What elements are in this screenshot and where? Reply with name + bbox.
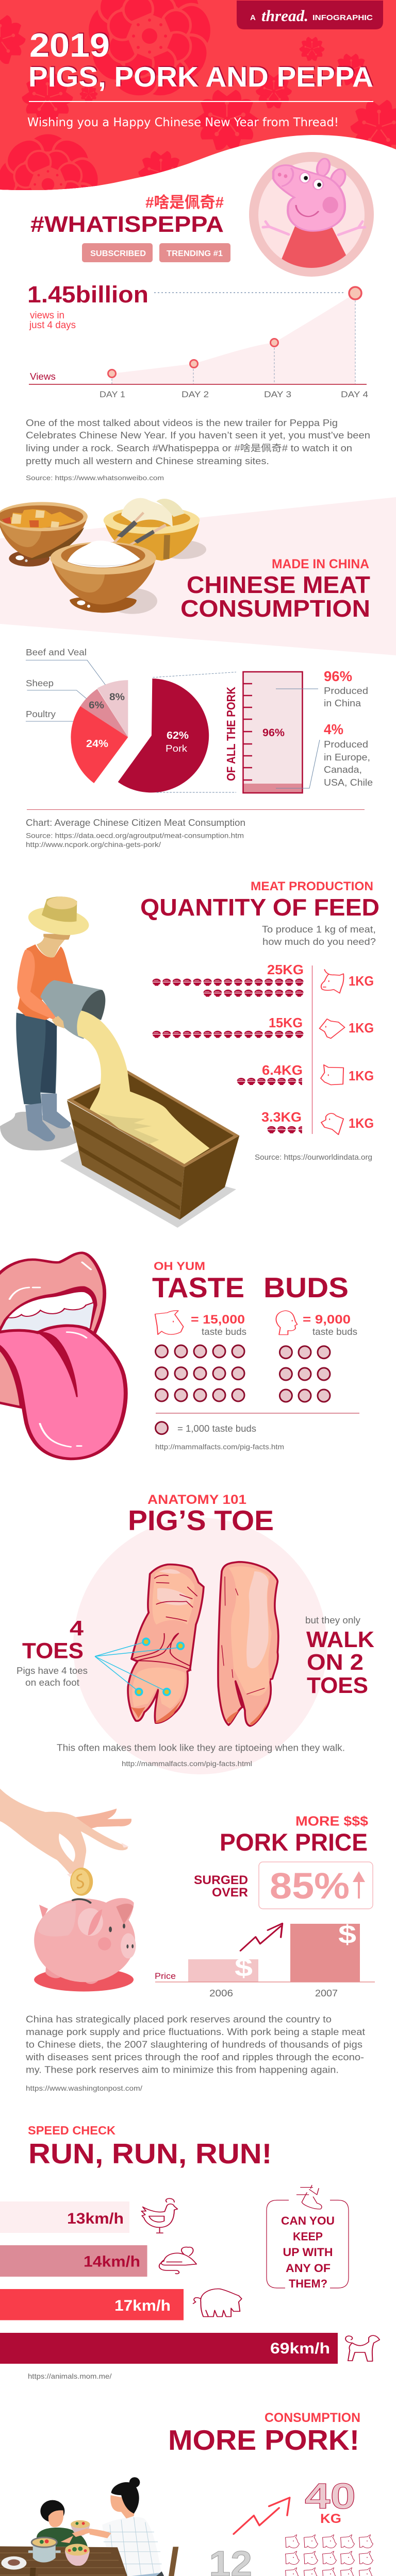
chart: feed quantities <box>152 962 374 1134</box>
title <box>28 25 374 93</box>
data points <box>108 287 361 377</box>
title rule <box>29 101 373 102</box>
icon: food bowls <box>0 498 206 614</box>
heading: taste buds <box>152 1260 349 1303</box>
animal icons <box>141 2198 380 2361</box>
heading: quantity of feed: QUANTITY OF FEED <box>140 894 380 921</box>
callout: surged over 85 percent: 85% <box>270 1866 350 1907</box>
text block: tiptoeing: This often makes them look like they are tiptoeing when they walk. <box>57 1742 345 1753</box>
bar: pig: 17km/h <box>114 2297 171 2314</box>
text block: peppa paragraph: living under a rock. Search #Whatispeppa or #啥是佩奇# to watch it on <box>26 443 352 453</box>
text block: pork reserves: to Chinese diets, the 2007 slaughtering of hundreds of thousands of pigs <box>26 2040 362 2050</box>
heading: pork price: MORE $$$ <box>295 1814 369 1829</box>
icon: peppa pig portrait <box>249 152 374 278</box>
text block: peppa paragraph: One of the most talked about videos is the new trailer for Peppa Pig <box>26 418 338 428</box>
caption <box>29 310 76 331</box>
trotter: front with toes marked <box>128 1565 204 1723</box>
heading: quantity of feed: how much do you need? <box>262 936 376 947</box>
caption: views in <box>30 310 64 321</box>
day labels: DAY 4 <box>341 389 368 399</box>
pie labels <box>26 647 189 754</box>
row: 6.4kg pig: 6.4KG <box>262 1062 303 1078</box>
day labels: DAY 3 <box>264 389 291 399</box>
heading: more pork: MORE PORK! <box>168 2424 359 2456</box>
stat: 40 kg in 2017: KG <box>320 2512 341 2526</box>
heading: more pork: CONSUMPTION <box>265 2411 360 2425</box>
text block: peppa paragraph: Celebrates Chinese New Year. If you haven’t seen it yet, you must’ve been <box>26 430 370 440</box>
callout text <box>281 2214 335 2290</box>
bar: 2007 <box>290 1924 360 1982</box>
button: trending <box>159 243 230 262</box>
heading: run, run, run: RUN, RUN, RUN! <box>28 2138 272 2170</box>
callout: can you keep up <box>267 2185 349 2290</box>
icon: mouth with tongue <box>0 1253 126 1459</box>
slice: sheep <box>80 689 128 737</box>
trotter: side view <box>218 1562 278 1726</box>
food on the table <box>1 2520 92 2570</box>
axis labels: 2007 <box>315 1988 338 1998</box>
stat: 96 percent <box>324 668 368 708</box>
heading: run, run, run <box>28 2124 272 2170</box>
heading: pork price: PORK PRICE <box>220 1828 368 1856</box>
text block: chart sources: Chart: Average Chinese Citizen Meat Consumption <box>26 818 245 828</box>
title: PIGS, PORK AND PEPPA <box>29 60 374 92</box>
stat: pig taste buds <box>155 1311 246 1401</box>
pictogram: 40 pig heads <box>286 2535 373 2576</box>
slice: beef and veal <box>97 680 128 737</box>
callout text: CAN YOU <box>281 2214 335 2227</box>
stat: 4 percent: Canada, <box>324 765 362 775</box>
heading: pig's toe: ANATOMY 101 <box>147 1493 246 1507</box>
coin <box>70 1868 93 1896</box>
stat: 4 percent: in Europe, <box>324 752 370 762</box>
callout: walk on 2 toes: TOES <box>307 1673 368 1698</box>
heading: taste buds: BUDS <box>263 1272 349 1303</box>
chart: running speed bars <box>0 2198 380 2364</box>
woman <box>79 2477 167 2576</box>
bar: mouse <box>0 2245 147 2277</box>
pie labels: Pork <box>166 743 188 754</box>
text block: pork reserves: with diseases sent prices through the roof and ripples through the econo- <box>25 2052 364 2062</box>
logo tab: INFOGRAPHIC <box>312 13 373 22</box>
chair: woman <box>111 2547 178 2576</box>
icon: running shoe <box>297 2185 322 2209</box>
logo tab: thread. <box>261 7 308 25</box>
stat: 96 percent: in China <box>324 698 361 708</box>
bar: chicken <box>0 2201 129 2233</box>
row: 25kg cow: 25KG <box>267 962 304 977</box>
text block: tiptoeing: http://mammalfacts.com/pig-facts.html <box>122 1759 252 1768</box>
heading: pig's toe: PIG’S TOE <box>128 1504 274 1536</box>
chart: pork price bars <box>155 1920 375 1998</box>
stat: pig taste buds: = 15,000 <box>191 1313 245 1327</box>
row: 15kg sheep <box>269 1015 374 1036</box>
callout text: KEEP <box>293 2230 323 2243</box>
pie labels: Poultry <box>26 709 56 719</box>
chart: meat consumption pie <box>26 647 236 792</box>
stat: human taste buds <box>276 1311 357 1402</box>
row: 25kg cow: 1KG <box>349 973 374 989</box>
bar: chicken: 13km/h <box>67 2210 124 2227</box>
caption: just 4 days <box>29 320 76 331</box>
callout: walk on 2 toes: ON 2 <box>307 1650 364 1675</box>
icon: human head <box>276 1311 297 1335</box>
heading: more pork <box>168 2411 360 2456</box>
pictogram: 15 pig buds <box>156 1345 244 1401</box>
slice: poultry <box>71 706 128 783</box>
row: 3.3kg chicken: 3.3KG <box>261 1109 302 1125</box>
stat: 4 percent: 4% <box>324 721 343 737</box>
y label: Views <box>30 371 56 382</box>
text block: chart sources: http://www.ncpork.org/china-gets-pork/ <box>26 840 161 849</box>
title: 2019 <box>29 26 110 64</box>
title: 2019 <box>30 25 111 63</box>
icon: hand and piggy bank <box>0 1789 136 1991</box>
legend: taste buds: http://mammalfacts.com/pig-facts.htm <box>155 1443 284 1451</box>
logo tab: A <box>250 13 256 22</box>
steamer with dumplings <box>103 498 206 561</box>
row: 3.3kg chicken <box>261 1109 374 1131</box>
row: 6.4kg pig <box>262 1062 374 1083</box>
arrow: rising <box>240 1923 283 1951</box>
rice bowl pictograms <box>152 979 307 1133</box>
callout text: THEM? <box>289 2277 327 2290</box>
callout: 4 toes: Pigs have 4 toes <box>16 1666 88 1676</box>
panel: pig's toe background <box>73 1518 327 1774</box>
text block: peppa paragraph: Source: https://www.whatsonweibo.com <box>26 474 164 482</box>
bar: dog <box>0 2333 338 2364</box>
stat: 40 kg in 2017 <box>286 2476 373 2576</box>
text block: pork reserves: https://www.washingtonpost.com/ <box>26 2084 142 2092</box>
bar: 2006 <box>188 1959 258 1982</box>
pie labels: 8% <box>109 692 125 703</box>
heading: chinese meat consumption: MADE IN CHINA <box>272 557 369 571</box>
chart: pork production bar <box>224 668 373 793</box>
bowl with tofu <box>0 502 88 567</box>
slice: pork <box>118 679 209 792</box>
day labels: DAY 2 <box>182 389 209 399</box>
chinese hashtag: #啥是佩奇# <box>145 194 224 211</box>
callout text: UP WITH <box>283 2246 333 2259</box>
pie labels: 62% <box>167 730 189 741</box>
text block: tiptoeing <box>57 1742 345 1768</box>
toe pointer lines <box>95 1642 177 1690</box>
child <box>37 2500 88 2576</box>
heading: run, run, run: SPEED CHECK <box>28 2124 116 2137</box>
bowl with rice <box>50 540 157 614</box>
heading: quantity of feed: To produce 1 kg of meat, <box>262 924 376 935</box>
text block: pork reserves: manage pork supply and price fluctuations. With pork being a staple meat <box>26 2027 365 2037</box>
bar: pig <box>0 2289 184 2320</box>
callout: surged over 85 percent <box>194 1862 373 1909</box>
text block: peppa paragraph <box>26 418 370 482</box>
english hashtag: #WHATISPEPPA <box>30 212 224 237</box>
panel: whatispeppa heading <box>30 194 230 262</box>
dollar signs <box>235 1920 356 1982</box>
stat: pig taste buds: taste buds <box>202 1327 246 1337</box>
row: 15kg sheep: 1KG <box>349 1020 374 1036</box>
pie labels: 6% <box>89 700 104 711</box>
source: speed: https://animals.mom.me/ <box>28 2372 112 2380</box>
chart area <box>112 293 355 384</box>
heading: chinese meat consumption: CHINESE MEAT <box>187 571 370 598</box>
heading: quantity of feed: MEAT PRODUCTION <box>251 879 373 893</box>
stat: 96 percent: Produced <box>324 686 368 696</box>
stat: 96 percent: 96% <box>324 668 352 684</box>
toe markers <box>136 1638 184 1695</box>
piggy bank <box>34 1898 136 1991</box>
callout: 4 toes: TOES <box>22 1639 84 1664</box>
panel: chinese meat consumption background <box>0 497 396 655</box>
row: 25kg cow <box>267 962 374 989</box>
axis labels <box>155 1971 338 1998</box>
callout: 4 toes: on each foot <box>25 1677 79 1688</box>
chart: views over 4 days <box>27 281 368 399</box>
panel: header <box>0 0 396 190</box>
axis labels: Price <box>155 1971 176 1981</box>
heading: taste buds: TASTE <box>152 1272 244 1303</box>
stat: human taste buds: taste buds <box>312 1327 357 1337</box>
day labels <box>100 389 368 399</box>
bar: dog: 69km/h <box>270 2340 330 2357</box>
title: PIGS, PORK AND PEPPA <box>28 61 373 93</box>
icon: farmer pouring feed into trough <box>0 896 239 1228</box>
pie labels: 24% <box>86 738 108 750</box>
button: subscribed <box>82 243 153 262</box>
callout: walk on 2 toes: WALK <box>306 1627 374 1652</box>
subtitle: Wishing you a Happy Chinese New Year from Thread! <box>27 116 339 129</box>
stat: 4 percent <box>324 721 373 788</box>
text block: chart sources <box>26 818 245 849</box>
callout frame <box>267 2200 349 2288</box>
row: 15kg sheep: 15KG <box>269 1015 303 1030</box>
callout text: ANY OF <box>286 2262 331 2275</box>
hand <box>0 1789 131 1882</box>
row: 6.4kg pig: 1KG <box>349 1068 374 1083</box>
stat: 4 percent: Produced <box>324 739 368 750</box>
dollar signs: $ <box>338 1920 356 1949</box>
callout: surged over 85 percent: OVER <box>212 1886 248 1900</box>
callout: walk on 2 toes: but they only <box>305 1615 360 1625</box>
heading: chinese meat consumption: CONSUMPTION <box>180 595 370 622</box>
heading: pork price <box>220 1814 369 1856</box>
callout: walk on 2 toes <box>305 1615 374 1698</box>
table <box>0 2546 127 2576</box>
stat: 4 percent: USA, Chile <box>324 777 373 788</box>
stat: human taste buds: = 9,000 <box>303 1313 351 1327</box>
dollar signs: $ <box>235 1953 253 1982</box>
pie labels: Beef and Veal <box>26 647 87 657</box>
heading: taste buds: OH YUM <box>154 1260 205 1273</box>
legend: taste buds: = 1,000 taste buds <box>177 1423 256 1434</box>
source: feed: Source: https://ourworldindata.org <box>255 1154 372 1162</box>
icon: family at dinner table <box>0 2477 178 2576</box>
bar value: 96% <box>262 727 285 739</box>
row: 3.3kg chicken: 1KG <box>349 1115 374 1131</box>
header background <box>0 0 396 190</box>
arrow: rising consumption <box>234 2498 290 2534</box>
logo tab <box>237 1 383 29</box>
heading: quantity of feed <box>140 879 380 947</box>
animal outline icons <box>320 970 345 1134</box>
icon: pig head <box>155 1311 184 1334</box>
callout: 4 toes: 4 <box>70 1616 84 1640</box>
axis labels: 2006 <box>209 1988 233 1998</box>
button: trending: TRENDING #1 <box>167 249 223 258</box>
legend: taste buds <box>155 1422 284 1451</box>
icon: pig trotters <box>95 1562 278 1726</box>
text block: pork reserves <box>25 2014 365 2092</box>
pictogram: 9 human buds <box>279 1346 330 1402</box>
stat: 40 kg in 2017: 40 <box>305 2476 356 2516</box>
day labels: DAY 1 <box>100 389 125 399</box>
callout: 4 toes <box>16 1616 88 1688</box>
pie labels: Sheep <box>26 678 54 688</box>
bar side label: OF ALL THE PORK <box>224 687 238 781</box>
heading: chinese meat consumption <box>180 557 370 622</box>
text block: chart sources: Source: https://data.oecd.org/agroutput/meat-consumption.htm <box>26 832 244 840</box>
bar: mouse: 14km/h <box>84 2253 140 2270</box>
text block: pork reserves: China has strategically placed pork reserves around the country to <box>26 2014 332 2025</box>
button: subscribed: SUBSCRIBED <box>90 249 146 258</box>
text block: pork reserves: my. These pork reserves aim to minimize this from happening again. <box>26 2065 339 2075</box>
text block: peppa paragraph: pretty much all western and Chinese streaming sites. <box>26 456 269 466</box>
callout: surged over 85 percent: SURGED <box>194 1873 248 1887</box>
big number: 1.45billion <box>27 281 148 308</box>
